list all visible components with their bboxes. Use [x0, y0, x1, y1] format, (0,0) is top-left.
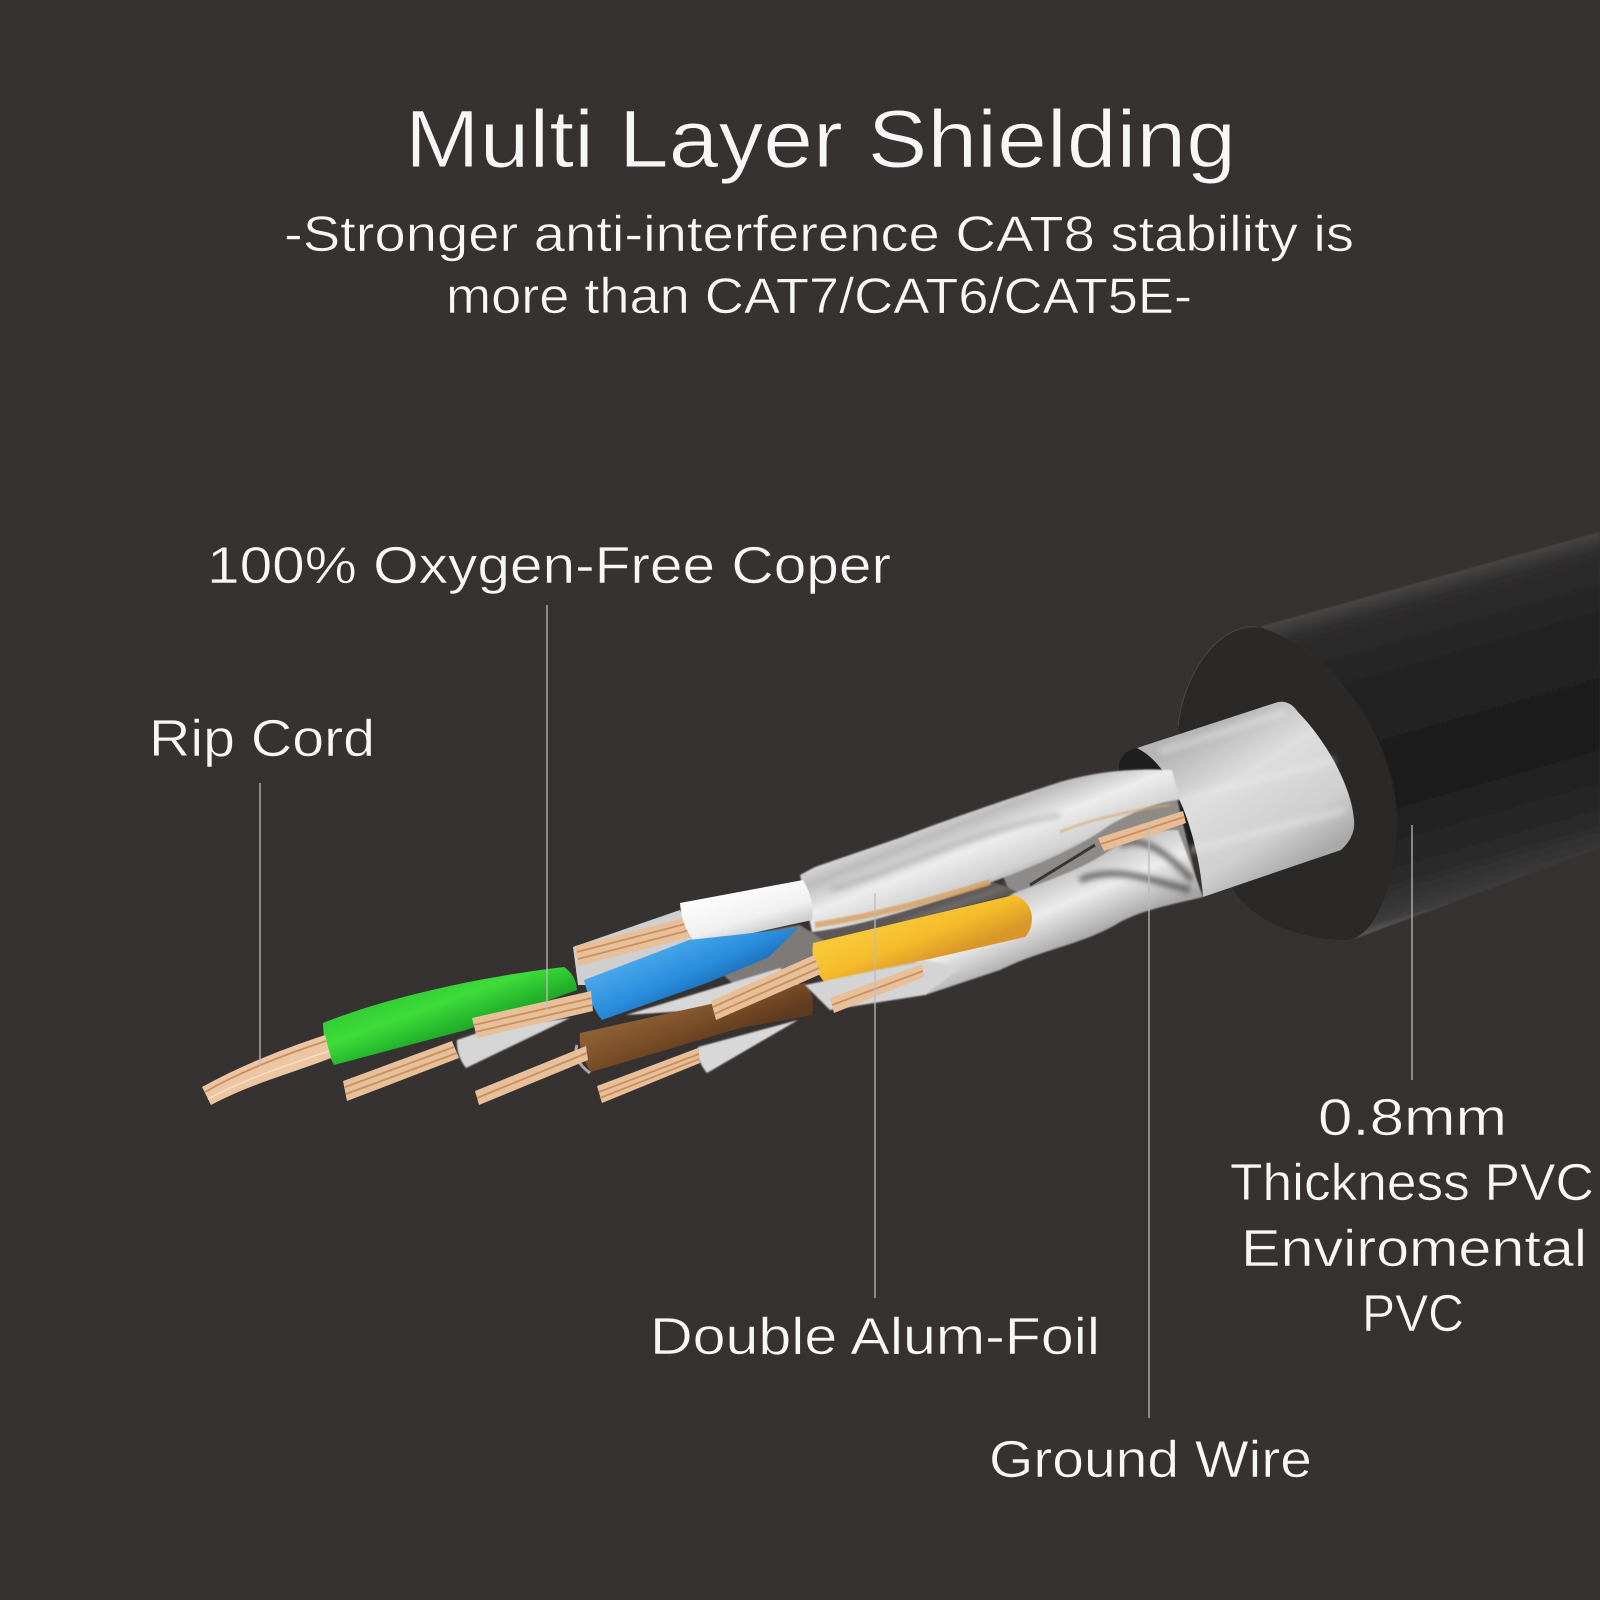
white pair wire [575, 880, 813, 966]
upper twisted foil [800, 770, 1180, 932]
subtitle: more than CAT7/CAT6/CAT5E- [446, 268, 1192, 324]
inner foil behind pairs [573, 910, 700, 985]
green wire [323, 967, 577, 1065]
label: rip cord: Rip Cord [149, 710, 375, 768]
ground wire [1098, 811, 1186, 851]
label: ground wire: Ground Wire [989, 1431, 1312, 1489]
foil collar [1119, 702, 1354, 900]
copper streak in foil [815, 882, 990, 925]
rip cord copper [202, 1035, 331, 1105]
leader: ground wire [1148, 823, 1150, 1418]
foil stub and copper lower [597, 1020, 798, 1103]
cable illustration [202, 532, 1600, 1105]
copper from blue [472, 991, 593, 1038]
label: oxygen-free copper: 100% Oxygen-Free Coper [207, 537, 891, 595]
copper over brown [711, 955, 821, 1020]
dark gap streaks [1080, 842, 1192, 890]
label: PVC thickness: PVC [1362, 1285, 1464, 1343]
foil stub under green [457, 1018, 570, 1068]
lower foil bundle [915, 830, 1203, 995]
leader: double alum-foil [874, 893, 876, 1298]
label: double alum-foil: Double Alum-Foil [650, 1308, 1100, 1366]
gap above yellow wire [806, 880, 1020, 945]
leader: PVC thickness [1411, 825, 1413, 1080]
foil stub and copper right of brown [805, 960, 960, 1013]
label: PVC thickness: Thickness PVC [1230, 1154, 1594, 1212]
outer PVC jacket [1178, 532, 1600, 940]
foil backing between pairs [1000, 790, 1200, 925]
subtitle [284, 206, 1354, 324]
subtitle: -Stronger anti-interference CAT8 stability is [284, 206, 1354, 262]
leader: rip cord [259, 783, 261, 1067]
copper from green stub [343, 1041, 459, 1101]
leader: oxygen-free copper [546, 605, 548, 1010]
title: Multi Layer Shielding [405, 94, 1236, 185]
label: PVC thickness: 0.8mm [1318, 1089, 1507, 1147]
blue wire [584, 928, 798, 1020]
yellow wire [812, 895, 1032, 983]
copper under brown [475, 1046, 588, 1105]
label: PVC thickness [1230, 1089, 1594, 1343]
label: PVC thickness: Enviromental [1241, 1220, 1587, 1278]
brown wire [580, 983, 813, 1072]
